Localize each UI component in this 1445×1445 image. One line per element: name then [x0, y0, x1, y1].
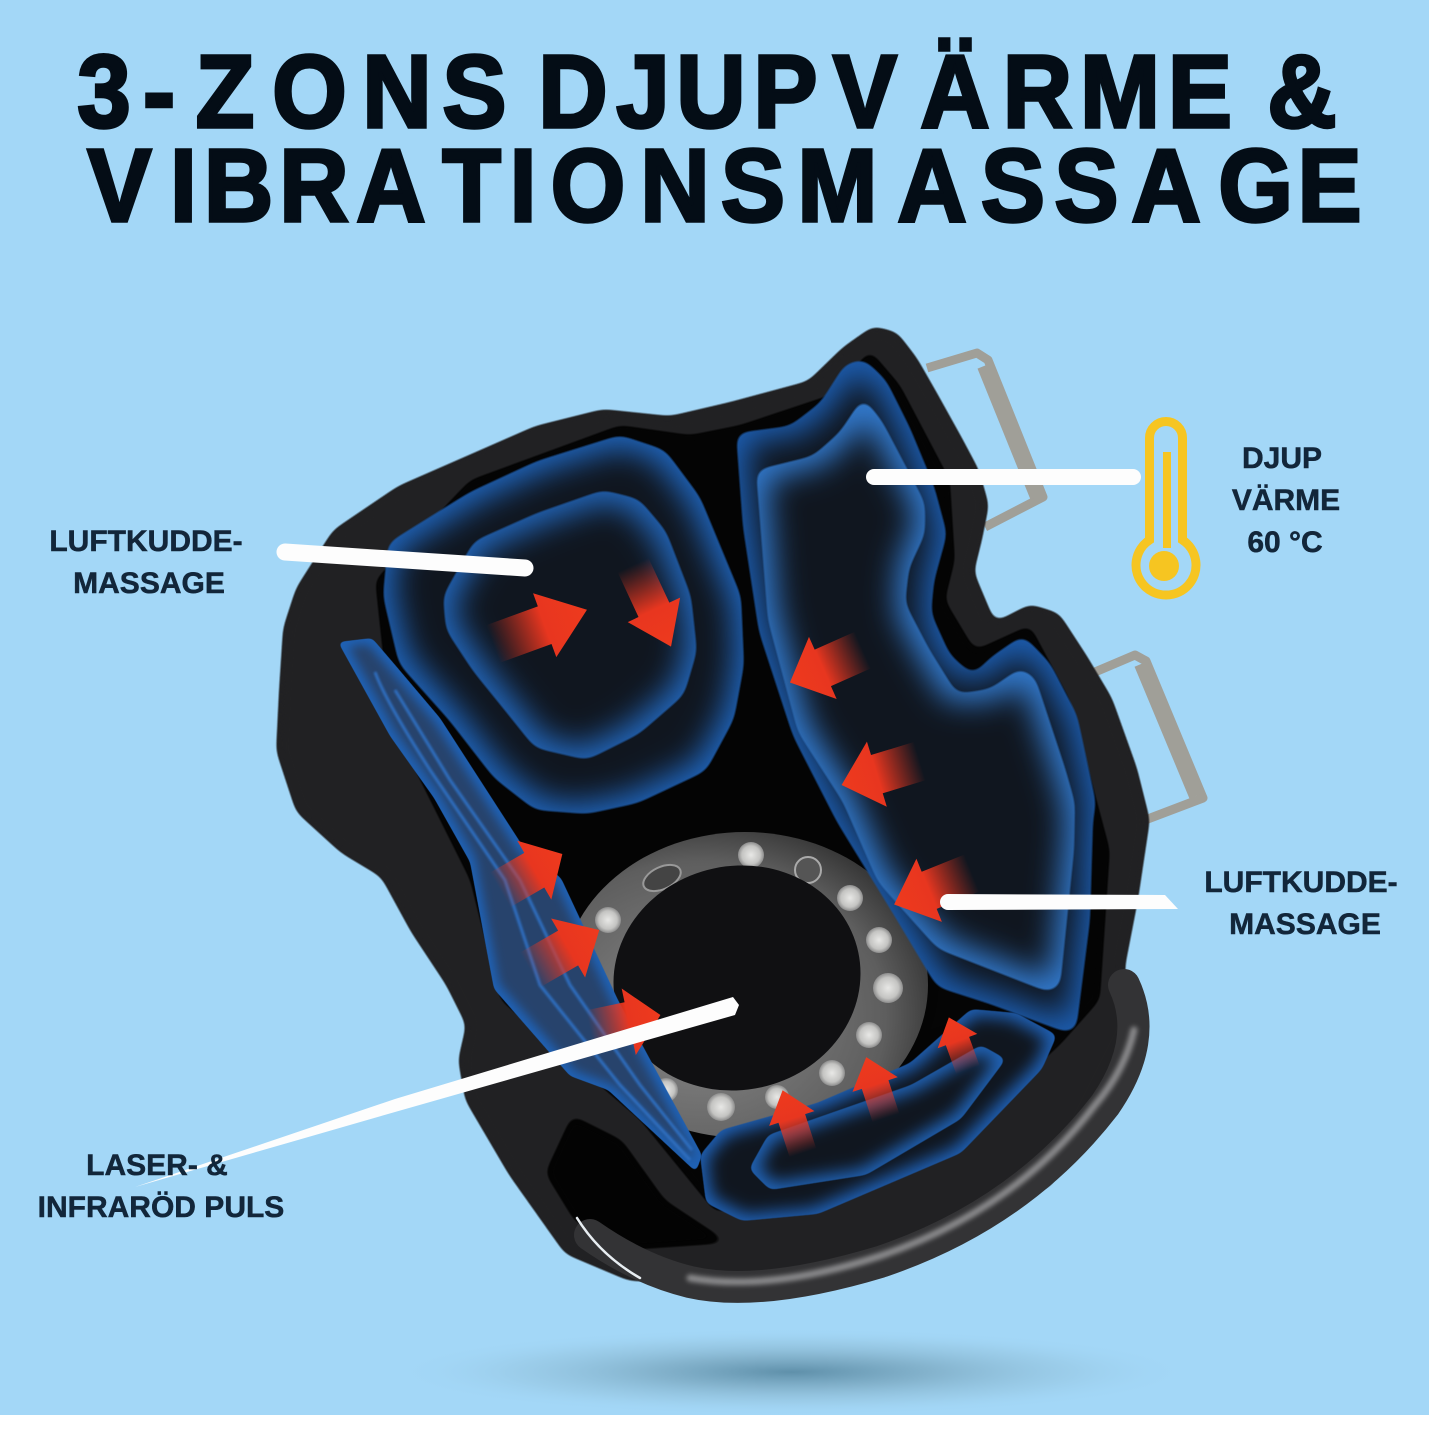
callout line: air cushion left [285, 552, 525, 568]
label: deep heat 60 C: 60 °C [1247, 526, 1323, 559]
blue pad bottom inner [749, 1045, 1006, 1190]
metal buckle lower [1095, 655, 1203, 822]
arrow: left strip middle [513, 901, 616, 999]
title: VIBRATIONSMASSAGE [88, 129, 1361, 244]
blue pad bottom outer [700, 1009, 1057, 1221]
metal ring [577, 985, 1134, 1287]
arrow: left strip bottom [583, 982, 667, 1063]
callout line: laser [135, 997, 739, 1187]
label: air cushion massage right: MASSAGE [1229, 908, 1381, 941]
label: deep heat 60 C [1232, 442, 1340, 559]
arrow: bottom pad middle [844, 1050, 909, 1125]
arrow: right pad middle [832, 728, 930, 817]
title: 3-ZONS DJUPVÄRME & [77, 35, 1337, 150]
icon: thermometer [1136, 422, 1196, 595]
blue pad right outer [736, 359, 1096, 1032]
arrow: bottom pad right [929, 1010, 988, 1077]
arrow: left strip top [483, 825, 579, 919]
label: air cushion massage left: LUFTKUDDE- [49, 525, 243, 558]
label: air cushion massage left [49, 525, 243, 600]
inner black cavity [375, 350, 1110, 1212]
arrow: bottom pad left [760, 1083, 826, 1160]
knee massager device [276, 326, 1203, 1287]
red arrows [481, 553, 988, 1160]
label: laser and infrared pulse: INFRARÖD PULS [38, 1191, 284, 1224]
blue pad upper-left outer [383, 435, 744, 814]
label: deep heat 60 C: VÄRME [1232, 484, 1340, 517]
title [77, 35, 1361, 244]
callout line: air cushion right [940, 894, 1178, 910]
label: air cushion massage left: MASSAGE [73, 567, 225, 600]
label: deep heat 60 C: DJUP [1242, 442, 1322, 475]
label: laser and infrared pulse: LASER- & [86, 1149, 228, 1182]
label: air cushion massage right [1204, 866, 1398, 941]
floor shadow [392, 1328, 1192, 1416]
blue pad right inner [756, 397, 1075, 992]
blue pad upper-left inner [443, 490, 697, 760]
metal buckle upper [927, 353, 1043, 527]
label: laser and infrared pulse [38, 1149, 284, 1224]
fabric body [276, 326, 1150, 1285]
label: air cushion massage right: LUFTKUDDE- [1204, 866, 1398, 899]
bottom-left opening [545, 1115, 730, 1250]
arrow: upper pad left [481, 578, 599, 676]
blue strip left [338, 638, 702, 1172]
arrow: right pad top [776, 619, 877, 714]
arrow: right pad bottom [881, 841, 985, 936]
arrow: upper pad right [607, 553, 697, 659]
central black disc [592, 843, 882, 1113]
vibration plate with LEDs [562, 832, 990, 1138]
callout line: deep heat [874, 469, 1133, 485]
